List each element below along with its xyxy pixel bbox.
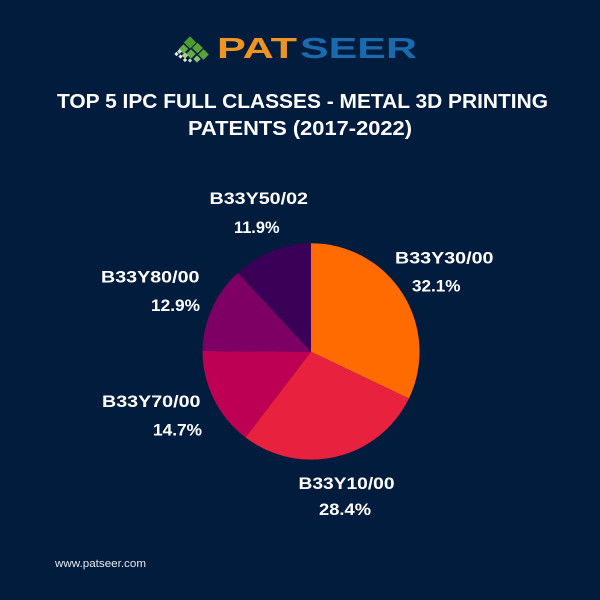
label: B33Y70/00: B33Y70/00 <box>102 392 200 411</box>
slice: B33Y50/02 11.9% <box>238 243 311 352</box>
label: B33Y10/00 <box>298 474 394 519</box>
title: PATENTS (2017-2022) <box>188 118 412 140</box>
label: B33Y50/02: 11.9% <box>234 218 280 237</box>
icon: green diamond cluster <box>174 36 209 63</box>
label: B33Y80/00 <box>101 268 200 315</box>
footer url: www.patseer.com <box>54 558 146 570</box>
label: B33Y30/00 <box>395 248 494 296</box>
pie chart <box>202 243 420 460</box>
logo word: SEER: SEER <box>300 33 417 65</box>
label: B33Y50/02 <box>210 189 308 237</box>
logo word: PAT: PAT <box>217 33 297 65</box>
title <box>57 91 548 140</box>
slice: B33Y70/00 14.7% <box>202 351 311 437</box>
label: B33Y70/00 <box>102 392 202 440</box>
slice: B33Y10/00 28.4% <box>246 352 409 460</box>
label: B33Y50/02: B33Y50/02 <box>210 189 308 208</box>
label: B33Y70/00: 14.7% <box>153 420 202 440</box>
label: B33Y30/00: 32.1% <box>412 276 460 296</box>
label: B33Y10/00: 28.4% <box>319 500 371 519</box>
title: TOP 5 IPC FULL CLASSES - METAL 3D PRINTING <box>57 91 548 113</box>
label: B33Y10/00: B33Y10/00 <box>298 474 394 493</box>
label: B33Y30/00: B33Y30/00 <box>395 248 494 268</box>
label: B33Y80/00: 12.9% <box>151 296 200 315</box>
slice: B33Y30/00 32.1% <box>311 243 420 398</box>
slice: B33Y80/00 12.9% <box>202 273 311 352</box>
logo: PatSeer <box>174 33 417 65</box>
label: B33Y80/00: B33Y80/00 <box>101 268 200 286</box>
